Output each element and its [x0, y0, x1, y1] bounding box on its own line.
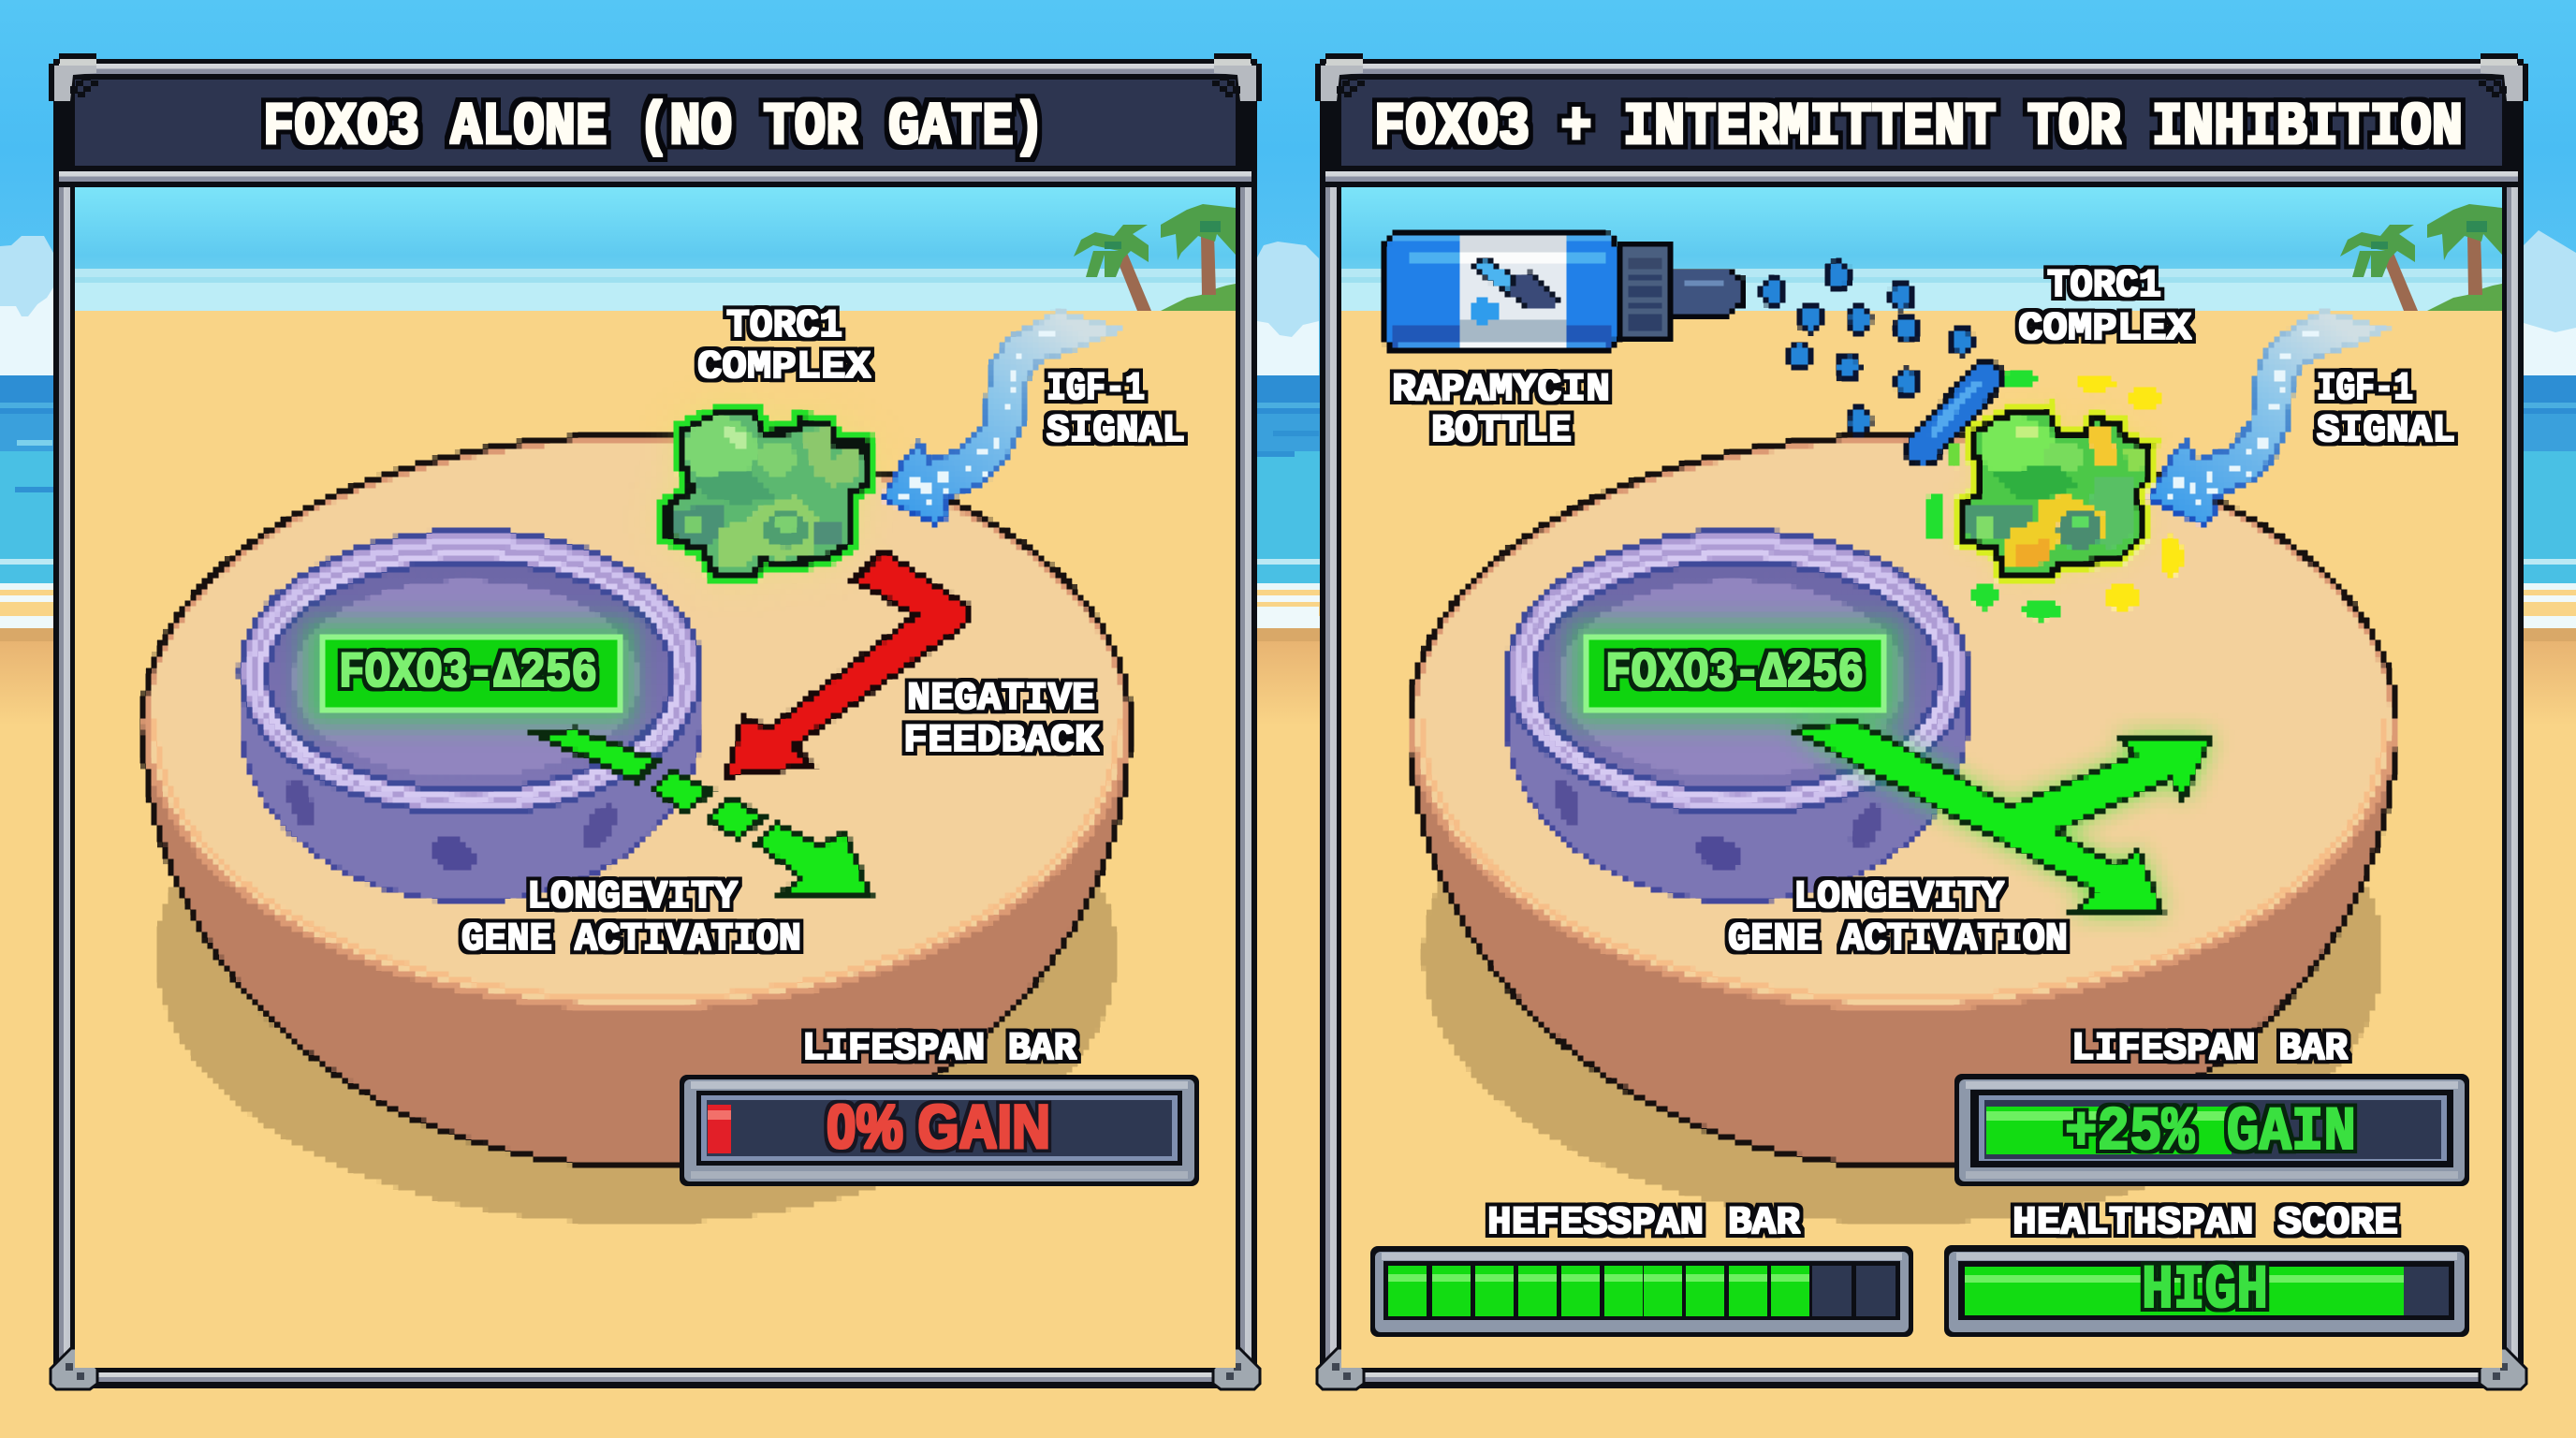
- TORC1 complex blob under inhibition: [1963, 410, 2150, 574]
- IGF-1 signal arrow: left: [883, 312, 1120, 524]
- rapamycin bottle: [1385, 231, 1741, 353]
- inhibitor rod: [1923, 378, 1986, 449]
- label: rapamycin bottle: [1392, 367, 1610, 453]
- label: FOXO3 tag right: FOXO3-Δ256: [1605, 645, 1864, 702]
- panel frame: left: [49, 53, 1262, 1389]
- label: longevity gene activation right: LONGEVITY: [1793, 874, 2005, 919]
- inhibition halo fragments: [1928, 371, 2183, 621]
- longevity dashed green arrow: [534, 729, 871, 896]
- rapamycin droplets: [1762, 262, 1972, 434]
- TORC1 complex blob: left: [667, 412, 868, 574]
- label: IGF-1 signal right: [2317, 366, 2455, 453]
- label: longevity gene activation: GENE ACTIVATION: [461, 917, 801, 961]
- label: longevity gene activation right: GENE ACTIVATION: [1728, 917, 2068, 961]
- label: TORC1 complex right: [2018, 263, 2192, 351]
- cell disc: right: [1410, 275, 2396, 1224]
- label: TORC1 complex: [697, 303, 871, 389]
- hefesspan segmented bar: [1370, 1246, 1913, 1337]
- panel: FOXO3 + intermittent TOR inhibition: [1315, 53, 2528, 1389]
- panel scene: left sky, sand and palm trees: [75, 187, 1236, 1368]
- IGF-1 signal arrow: right: [2149, 312, 2386, 524]
- label: IGF-1 signal right: IGF-1: [2317, 366, 2413, 411]
- healthspan score bar: HIGH: [2142, 1255, 2268, 1326]
- label: healthspan score: HEALTHSPAN SCORE: [2012, 1200, 2398, 1245]
- cell scene: left: [143, 275, 1130, 1224]
- label: negative feedback: [903, 676, 1100, 763]
- label: rapamycin bottle: BOTTLE: [1431, 408, 1572, 453]
- label: FOXO3 tag: FOXO3-Δ256: [339, 645, 597, 702]
- label: IGF-1 signal: IGF-1: [1046, 366, 1145, 411]
- label: longevity gene activation right: [1728, 874, 2068, 961]
- label: IGF-1 signal right: SIGNAL: [2317, 408, 2455, 453]
- label: longevity gene activation: LONGEVITY: [527, 874, 739, 919]
- lifespan bar: +25% gain: +25% GAIN: [2065, 1097, 2356, 1167]
- panel frame: right: [1315, 53, 2528, 1389]
- label: lifespan bar right: LIFESPAN BAR: [2071, 1026, 2349, 1071]
- label: longevity gene activation: [461, 874, 801, 961]
- label: negative feedback: FEEDBACK: [903, 718, 1100, 763]
- label: IGF-1 signal: SIGNAL: [1046, 408, 1185, 453]
- label: IGF-1 signal: [1046, 366, 1185, 453]
- panel scene: right sky, sand and palm trees: [1341, 187, 2502, 1368]
- nucleus: right: [1507, 531, 1968, 902]
- FOXO3 tag box: left: [304, 623, 634, 724]
- label: TORC1 complex right: COMPLEX: [2018, 306, 2192, 351]
- cell disc: left: [143, 275, 1130, 1224]
- label: lifespan bar: LIFESPAN BAR: [802, 1026, 1077, 1071]
- lifespan bar: 0% gain: [680, 1075, 1199, 1186]
- label: hefesspan bar: HEFESSPAN BAR: [1487, 1200, 1801, 1245]
- label: rapamycin bottle: RAPAMYCIN: [1392, 367, 1610, 412]
- cell scene: right: [1385, 231, 2396, 1224]
- lifespan bar: +25% gain: [1954, 1074, 2469, 1186]
- healthspan score bar: [1944, 1245, 2469, 1337]
- label: TORC1 complex: COMPLEX: [697, 345, 871, 389]
- negative feedback red arrow: [726, 550, 969, 776]
- lifespan bar: 0% gain: 0% GAIN: [827, 1092, 1050, 1161]
- longevity green branching arrow: [1793, 721, 2212, 912]
- label: TORC1 complex: TORC1: [726, 303, 842, 348]
- nucleus: left: [241, 531, 701, 902]
- label: negative feedback: NEGATIVE: [907, 676, 1095, 721]
- FOXO3 tag box: right: [1571, 623, 1900, 724]
- title: left: FOXO3 ALONE (NO TOR GATE): [263, 95, 1045, 162]
- panel: FOXO3 alone: [49, 53, 1262, 1389]
- label: TORC1 complex right: TORC1: [2047, 263, 2161, 308]
